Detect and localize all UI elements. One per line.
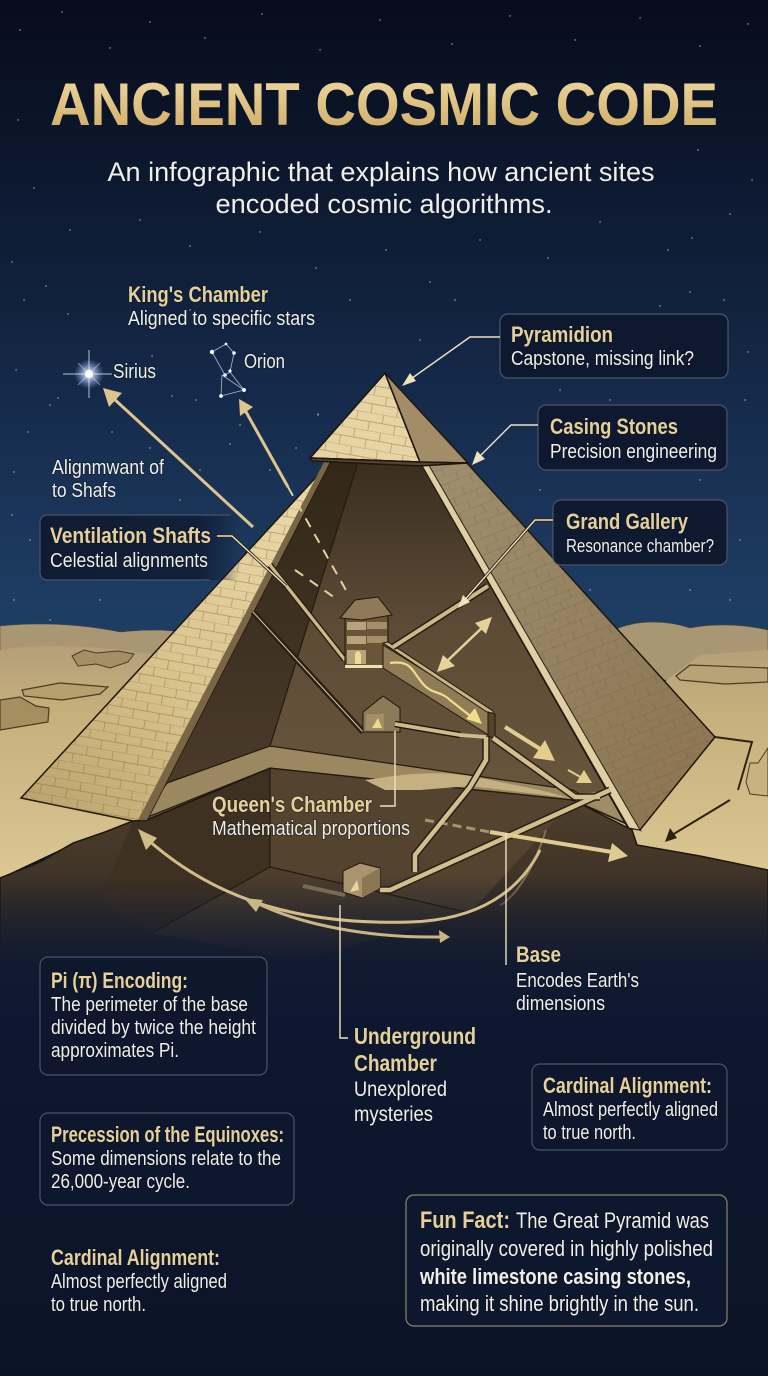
label: Queen's Chamber: Mathematical proportions: [212, 818, 410, 840]
floor band: [140, 746, 630, 825]
panel: Pyramidion: Capstone, missing link?: [511, 348, 694, 370]
lower navy background: [0, 960, 768, 1376]
label: Base: Base: [516, 942, 561, 967]
label: King's Chamber: King's Chamber: [128, 282, 268, 307]
panel: Casing Stones: Precision engineering: [550, 441, 717, 463]
subtitle: An infographic that explains how ancient sites: [108, 157, 654, 187]
wide base curve arrow: [138, 829, 540, 922]
panel: Fun Fact: originally covered in highly polished: [420, 1236, 713, 1261]
panel: Precession of the Equinoxes: Some dimensions relate to the: [51, 1148, 281, 1170]
label: Queen's Chamber: [212, 792, 410, 840]
double arrow: [437, 617, 492, 672]
leader: Grand Gallery: [458, 520, 553, 608]
panel: Fun Fact: white limestone casing stones,: [419, 1264, 691, 1289]
leader: Casing Stones: [472, 425, 538, 465]
pyramid: right brick face: [420, 462, 715, 830]
arrow to Sirius: [103, 388, 253, 527]
label: Underground Chamber: [354, 1023, 476, 1126]
feed tube light: [393, 586, 488, 647]
interior of pyramid: [147, 462, 640, 830]
text: Cardinal Alignment left: [51, 1245, 227, 1316]
text: Cardinal Alignment left: Almost perfectly aligned: [51, 1271, 227, 1293]
leader: Base: [505, 833, 507, 965]
ventilation shafts: [253, 487, 363, 732]
panel: Ventilation Shafts: Ventilation Shafts: [50, 523, 211, 548]
leader: Queen's Chamber: [380, 731, 395, 806]
pyramid: left brick face: [21, 462, 330, 821]
label: alignment of shafts: Alignmwant of: [52, 457, 164, 479]
panel: Pi encoding: Pi (π) Encoding:: [51, 968, 188, 993]
descending passages: [380, 737, 610, 890]
king's chamber: [340, 597, 392, 668]
Orion constellation: [210, 343, 246, 398]
label: Underground Chamber: Chamber: [354, 1050, 437, 1076]
panel: Pi encoding: divided by twice the height: [51, 1017, 256, 1039]
panel: Precession of the Equinoxes: [40, 1113, 294, 1205]
panel: Pi encoding: [40, 957, 267, 1075]
panel: Pi encoding: approximates Pi.: [51, 1040, 179, 1062]
text: Cardinal Alignment left: to true north.: [51, 1294, 146, 1316]
panel: Pi encoding: The perimeter of the base: [51, 994, 248, 1016]
pit: back walls: [100, 768, 573, 960]
passages and chambers: [253, 487, 610, 898]
grand gallery: [383, 642, 495, 739]
panel: Fun Fact: making it shine brightly in the sun.: [420, 1291, 699, 1316]
desert sand ground: [0, 646, 768, 880]
text: Cardinal Alignment left: Cardinal Alignment:: [51, 1245, 220, 1270]
panel: Fun Fact: [406, 1195, 727, 1326]
panel: Pyramidion: Pyramidion: [511, 322, 613, 347]
label: Sirius: Sirius: [113, 361, 156, 383]
label: Base: Encodes Earth's: [516, 970, 639, 992]
distant desert hills: [0, 622, 768, 680]
panel: Ventilation Shafts: Celestial alignments: [50, 550, 208, 572]
leader: Underground Chamber: [340, 905, 348, 1038]
leader: Ventilation Shafts: [217, 536, 286, 586]
label: King's Chamber: Aligned to specific stars: [128, 308, 315, 330]
panel: Cardinal Alignment right: to true north.: [543, 1122, 636, 1144]
panel: Cardinal Alignment right: [532, 1064, 727, 1150]
panel: Casing Stones: [538, 405, 727, 470]
panel: Fun Fact: Fun Fact:: [420, 1207, 510, 1234]
panel: Pyramidion: [500, 314, 728, 378]
label: Base: dimensions: [516, 993, 605, 1015]
panel: Grand Gallery: [553, 500, 727, 565]
panel: Grand Gallery: Grand Gallery: [566, 509, 689, 534]
panel: Cardinal Alignment right: Cardinal Alignment:: [543, 1073, 712, 1098]
alignment arrows: [103, 388, 730, 943]
panel: Precession of the Equinoxes: 26,000-year cycle.: [51, 1171, 190, 1193]
queen's chamber: [363, 696, 486, 737]
flow arrows: [505, 727, 592, 783]
arrow to Orion: [239, 399, 288, 487]
panel: Fun Fact: The Great Pyramid was: [516, 1208, 709, 1233]
panel: Grand Gallery: Resonance chamber?: [566, 536, 714, 556]
label: alignment of shafts: to Shafs: [52, 480, 116, 502]
earth cutaway: [0, 768, 768, 962]
label: Orion: Orion: [244, 351, 285, 373]
subtitle: encoded cosmic algorithms.: [216, 189, 552, 219]
desert rock: right block: [676, 665, 768, 796]
label: Underground Chamber: Underground: [354, 1023, 476, 1049]
label: Underground Chamber: Unexplored: [354, 1078, 447, 1101]
pyramidion capstone: [310, 373, 468, 466]
title: ANCIENT COSMIC CODE: [50, 71, 718, 138]
label: alignment of shafts: [52, 457, 164, 502]
panel: Cardinal Alignment right: Almost perfectly aligned: [543, 1099, 718, 1121]
dark fade: [0, 875, 768, 962]
panel: Ventilation Shafts: [40, 515, 240, 580]
desert rock: left block: [0, 650, 134, 730]
leader: Pyramidion: [402, 337, 500, 386]
label: Queen's Chamber: Queen's Chamber: [212, 792, 372, 817]
panel: Precession of the Equinoxes: Precession of the Equinoxes:: [51, 1122, 284, 1147]
label: Underground Chamber: mysteries: [354, 1103, 433, 1126]
grand gallery feed tube: [393, 586, 488, 647]
underground chamber: [303, 863, 380, 898]
subtitle: [108, 157, 654, 219]
Sirius star: [63, 350, 112, 398]
label: King's Chamber: [128, 282, 315, 330]
stars: [12, 12, 752, 620]
background: night sky: [0, 0, 768, 640]
label: Base: [516, 942, 639, 1015]
dark diagonal arrow: [665, 800, 730, 842]
panel: Casing Stones: Casing Stones: [550, 414, 678, 439]
base arrow: [425, 820, 628, 862]
lower curve arrow: [244, 898, 450, 943]
